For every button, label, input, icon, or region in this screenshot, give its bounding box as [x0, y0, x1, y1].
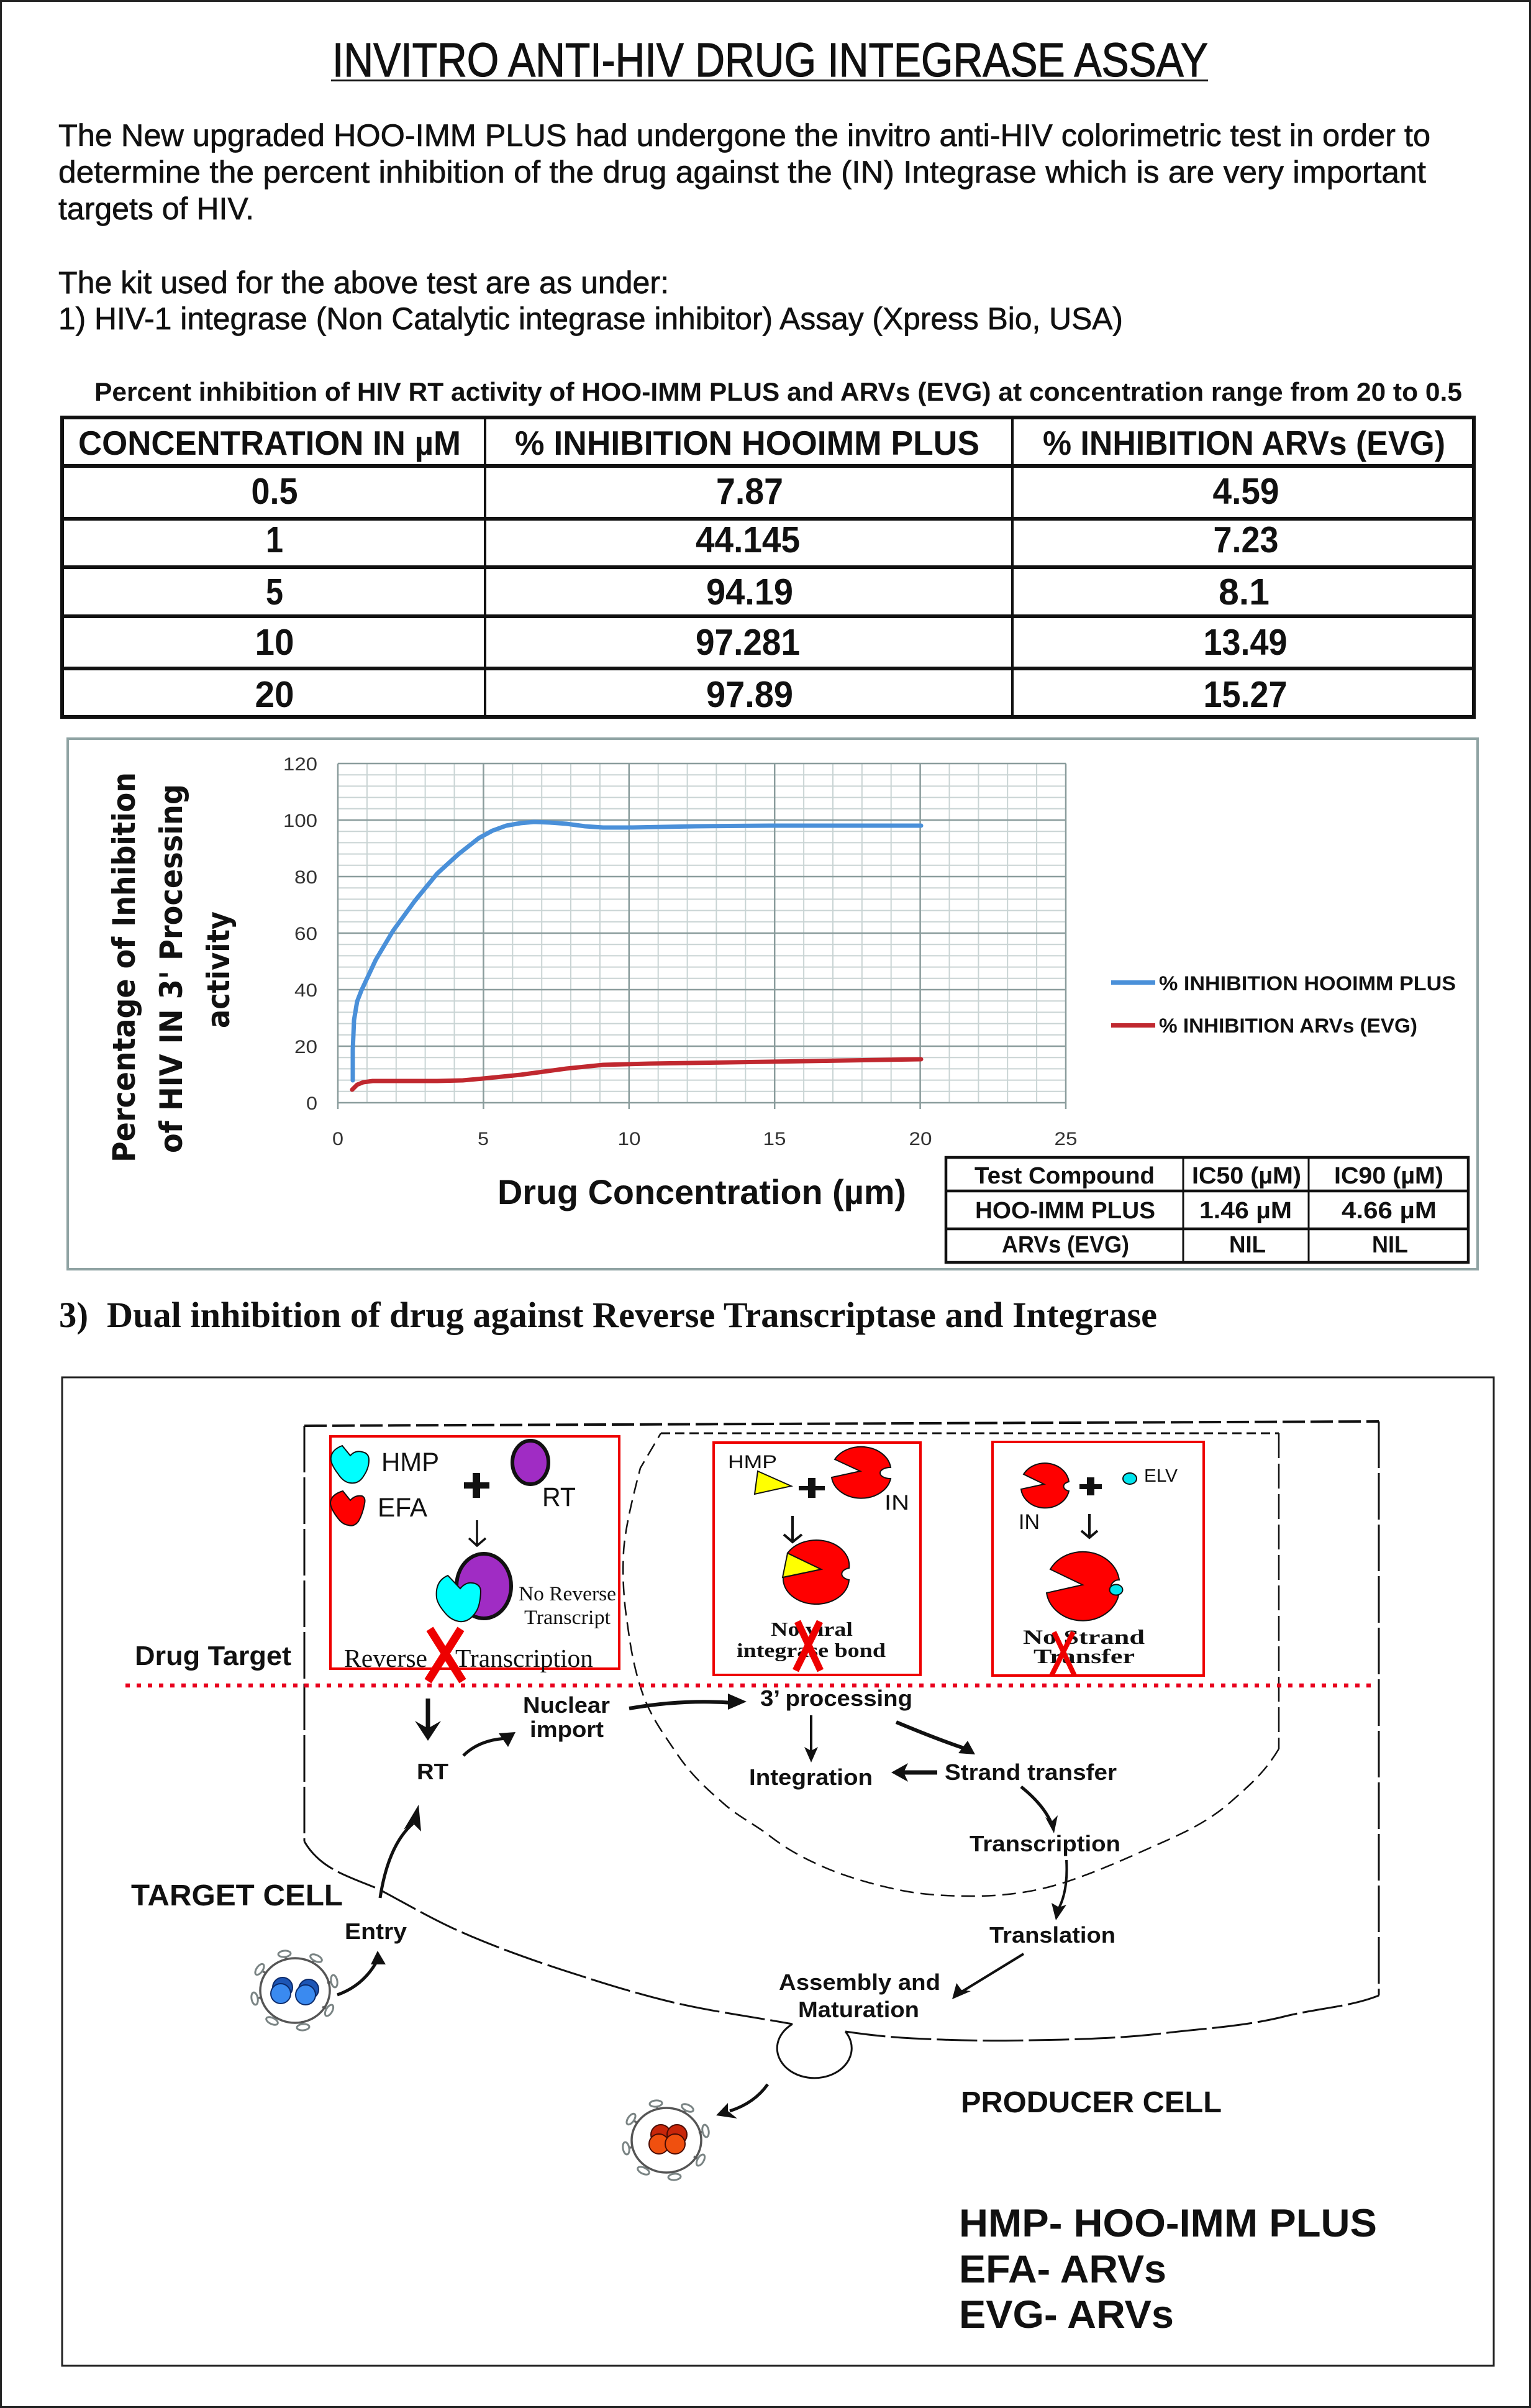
pathway labels: 3’ processing [760, 1685, 912, 1711]
y axis title [106, 772, 237, 1162]
inhibition data table: 97.89 [706, 674, 793, 715]
inhibition data table: % INHIBITION ARVs (EVG) [1043, 424, 1445, 462]
inhibition data table: 1 [266, 519, 283, 560]
inhibition data table: 94.19 [706, 572, 793, 613]
chart grid [338, 764, 1066, 1109]
pathway labels: import [530, 1717, 604, 1742]
inhibition data table: CONCENTRATION IN µM [78, 424, 461, 462]
kit text block: The kit used for the above test are as under: [58, 265, 669, 300]
panel: line chart [68, 739, 1478, 1269]
intro text block: The New upgraded HOO-IMM PLUS had undergone the invitro anti-HIV colorimetric test in order to [58, 118, 1430, 153]
icon: integrase pacman [832, 1447, 891, 1498]
inhibition data table: 4.59 [1212, 471, 1279, 512]
table caption: Percent inhibition of HIV RT activity of HOO-IMM PLUS and ARVs (EVG) at concentration range from 20 to 0.5 [94, 377, 1462, 406]
IC50 IC90 table: NIL [1372, 1232, 1408, 1258]
pathway labels: Translation [989, 1922, 1115, 1948]
intro text block: determine the percent inhibition of the drug against the (IN) Integrase which is are very important [58, 155, 1426, 189]
red box 2: integrase bond block: integrase bond [737, 1639, 886, 1661]
x axis tick labels: 15 [763, 1129, 786, 1149]
icon: red X [428, 1629, 463, 1681]
title: INVITRO ANTI-HIV DRUG INTEGRASE ASSAY [332, 34, 1208, 87]
inhibition data table: 44.145 [696, 519, 800, 560]
abbreviation key: EVG- ARVs [959, 2293, 1174, 2337]
red box 1: reverse transcription block [330, 1436, 619, 1681]
pathway labels: Nuclear [523, 1692, 610, 1718]
inhibition data table: 0.5 [251, 471, 298, 512]
y axis tick labels: 100 [283, 811, 317, 831]
x axis title: Drug Concentration (µm) [497, 1172, 906, 1211]
IC50 IC90 table: IC50 (µM) [1192, 1163, 1301, 1189]
label: Drug Target: Drug Target [135, 1641, 291, 1671]
IC50 IC90 table [945, 1157, 1469, 1262]
abbreviation key: HMP- HOO-IMM PLUS [959, 2202, 1377, 2245]
y axis title: activity [201, 911, 237, 1028]
integration compartment (nucleus) [623, 1433, 1279, 1896]
inhibition data table: 15.27 [1204, 674, 1287, 715]
inhibition data table: 13.49 [1204, 622, 1287, 663]
inhibition data table: 10 [255, 622, 294, 663]
pathway labels: Integration [749, 1764, 873, 1790]
red box 3: strand transfer block: ELV [1144, 1466, 1178, 1486]
red box 1: reverse transcription block: No Reverse [519, 1583, 616, 1605]
inhibition data table [60, 417, 1474, 717]
y axis tick labels: 20 [294, 1037, 317, 1057]
x axis tick labels [332, 1129, 1077, 1149]
red box 1: reverse transcription block: Transcription [455, 1644, 593, 1672]
icon: bound integrase with ELV [1047, 1552, 1123, 1621]
y axis title: Percentage of Inhibition [106, 772, 142, 1162]
legend: % INHIBITION HOOIMM PLUS [1159, 972, 1456, 995]
series: ARVs curve [352, 1059, 921, 1090]
IC50 IC90 table: HOO-IMM PLUS [975, 1198, 1155, 1224]
pathway labels: Entry [345, 1918, 407, 1944]
pathway labels: TARGET CELL [131, 1879, 343, 1912]
inhibition data table: 20 [255, 674, 294, 715]
icon: red X [796, 1621, 820, 1671]
icon: RT enzyme [512, 1441, 548, 1484]
x axis tick labels: 20 [909, 1129, 932, 1149]
IC50 IC90 table: NIL [1229, 1232, 1266, 1258]
arrow [784, 1516, 802, 1542]
red box 1: reverse transcription block: Reverse [344, 1644, 427, 1672]
pathway labels: RT [417, 1759, 448, 1784]
red box 2: integrase bond block [714, 1443, 920, 1675]
x axis tick labels: 10 [617, 1129, 641, 1149]
icon: HMP blob [331, 1446, 369, 1483]
y axis tick labels: 0 [306, 1093, 317, 1114]
kit text block: 1) HIV-1 integrase (Non Catalytic integrase inhibitor) Assay (Xpress Bio, USA) [58, 301, 1123, 336]
IC50 IC90 table: 1.46 µM [1199, 1198, 1292, 1224]
inhibition data table: 5 [266, 572, 283, 613]
pathway labels: Assembly and [779, 1969, 940, 1995]
inhibition data table: 97.281 [696, 622, 800, 663]
inhibition data table: 7.87 [716, 471, 783, 512]
section heading: Dual inhibition of drug against Reverse Transcriptase and Integrase [107, 1295, 1157, 1335]
red box 3: strand transfer block: IN [1019, 1510, 1040, 1534]
icon: plus [1079, 1477, 1102, 1495]
target cell membrane [304, 1421, 1379, 2041]
pathway labels: Strand transfer [945, 1759, 1117, 1785]
arrow [1081, 1514, 1097, 1538]
y axis title: of HIV IN 3' Processing [153, 784, 189, 1153]
icon: HMP triangle [755, 1471, 791, 1494]
x axis tick labels: 25 [1055, 1129, 1077, 1149]
series: HOOIMM PLUS curve [353, 822, 921, 1080]
icon: EFA blob [330, 1491, 365, 1526]
y axis tick labels: 60 [294, 924, 317, 944]
pathway labels [131, 1685, 1222, 2119]
icon: integrase pacman [1021, 1463, 1069, 1508]
inhibition data table: 8.1 [1219, 572, 1270, 613]
icon: blue virus [250, 1950, 338, 2031]
IC50 IC90 table: ARVs (EVG) [1002, 1232, 1129, 1258]
icon: ELV dot [1123, 1473, 1137, 1484]
kit text block [58, 265, 1123, 336]
red box 1: reverse transcription block: EFA [378, 1493, 427, 1523]
icon: bound integrase [783, 1540, 849, 1604]
panel: HIV life cycle diagram [62, 1377, 1494, 2366]
red box 2: integrase bond block: IN [884, 1491, 909, 1515]
red box 1: reverse transcription block: RT [542, 1482, 576, 1512]
drug target dotted line [125, 1684, 1376, 1687]
y axis tick labels [283, 754, 317, 1114]
y axis tick labels: 80 [294, 867, 317, 888]
icon: plus [464, 1473, 489, 1498]
legend: % INHIBITION ARVs (EVG) [1159, 1015, 1417, 1037]
pathway labels: Maturation [798, 1997, 919, 2022]
arrow [469, 1520, 486, 1546]
inhibition data table: 7.23 [1214, 519, 1278, 560]
inhibition data table: % INHIBITION HOOIMM PLUS [515, 424, 979, 462]
icon: red virus [622, 2100, 710, 2181]
x axis tick labels: 5 [478, 1129, 489, 1149]
icon: plus [799, 1478, 825, 1498]
y axis tick labels: 40 [294, 980, 317, 1001]
pathway arrows [337, 1694, 1066, 2118]
red box 2: integrase bond block: No viral [771, 1618, 853, 1640]
red box 3: strand transfer block: Transfer [1034, 1646, 1135, 1668]
abbreviation key [959, 2202, 1377, 2337]
red box 1: reverse transcription block: Transcript [524, 1607, 611, 1629]
icon: bound complex [437, 1554, 511, 1621]
legend [1111, 972, 1456, 1037]
intro text block [58, 118, 1430, 226]
abbreviation key: EFA- ARVs [959, 2248, 1166, 2291]
section heading: 3) [59, 1295, 88, 1335]
IC50 IC90 table: IC90 (µM) [1334, 1163, 1443, 1189]
y axis tick labels: 120 [283, 754, 317, 775]
red box 3: strand transfer block: No Strand [1023, 1626, 1145, 1649]
red box 2: integrase bond block: HMP [728, 1452, 777, 1472]
bud [777, 2024, 852, 2078]
red box 1: reverse transcription block: HMP [381, 1448, 439, 1477]
icon: red X [1052, 1632, 1074, 1676]
IC50 IC90 table: Test Compound [974, 1163, 1155, 1189]
intro text block: targets of HIV. [58, 191, 254, 226]
x axis tick labels: 0 [332, 1129, 343, 1149]
red box 3: strand transfer block [993, 1442, 1204, 1676]
pathway labels: Transcription [970, 1831, 1120, 1856]
pathway labels: PRODUCER CELL [961, 2086, 1222, 2119]
IC50 IC90 table: 4.66 µM [1342, 1198, 1437, 1224]
